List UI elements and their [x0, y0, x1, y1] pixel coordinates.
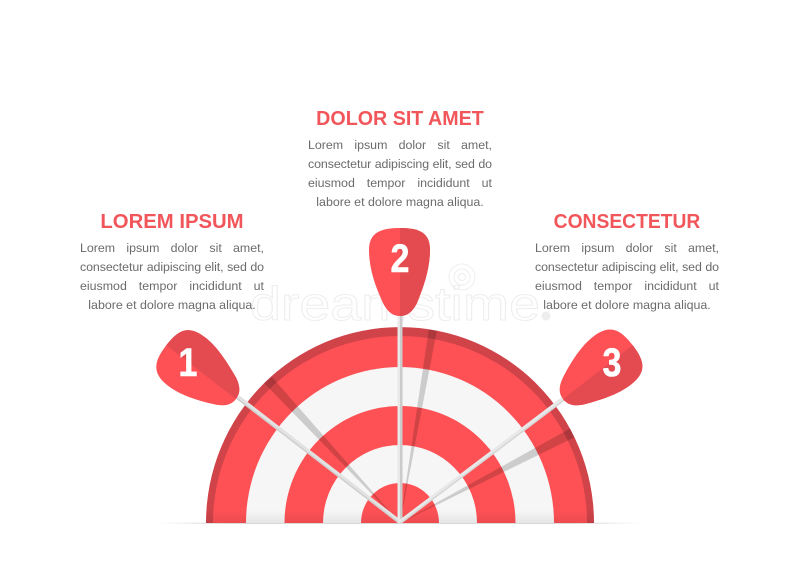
- baseline shadow: [158, 522, 642, 524]
- dart 2: [369, 228, 430, 523]
- body text 1: consectetur adipiscing elit, sed do: [80, 260, 264, 274]
- body text 2: eiusmod tempor incididunt ut: [308, 176, 492, 190]
- body text 1: labore et dolore magna aliqua.: [88, 298, 256, 312]
- target illustration: [156, 228, 642, 524]
- text block: Lorem Ipsum: [80, 210, 264, 312]
- heading: Consectetur: CONSECTETUR: [554, 210, 700, 233]
- body text 3: Lorem ipsum dolor sit amet,: [535, 241, 719, 255]
- dart 1: [147, 322, 400, 523]
- body text 2: consectetur adipiscing elit, sed do: [308, 157, 492, 171]
- dart 1: 1: [179, 339, 197, 385]
- body text 2: [308, 138, 492, 209]
- dart 3: [400, 321, 651, 523]
- watermark: [250, 264, 550, 330]
- body text 3: consectetur adipiscing elit, sed do: [535, 260, 719, 274]
- body text 1: eiusmod tempor incididunt ut: [80, 279, 264, 293]
- text block: Dolor Sit Amet: [308, 107, 492, 209]
- dart 2: 2: [391, 235, 409, 281]
- body text 3: [535, 241, 719, 312]
- text block: Consectetur: [535, 210, 719, 312]
- body text 2: Lorem ipsum dolor sit amet,: [308, 138, 492, 152]
- heading: Lorem Ipsum: LOREM IPSUM: [100, 210, 244, 233]
- dart shadows on board: [264, 328, 575, 523]
- body text 3: labore et dolore magna aliqua.: [543, 298, 711, 312]
- watermark: dreamstime: [250, 277, 540, 330]
- body text 1: Lorem ipsum dolor sit amet,: [80, 241, 264, 255]
- body text 3: eiusmod tempor incididunt ut: [535, 279, 719, 293]
- body text 1: [80, 241, 264, 312]
- heading: Dolor Sit Amet: DOLOR SIT AMET: [316, 107, 484, 130]
- dartboard: [206, 327, 594, 523]
- body text 2: labore et dolore magna aliqua.: [316, 195, 484, 209]
- dart 3: 3: [603, 339, 621, 385]
